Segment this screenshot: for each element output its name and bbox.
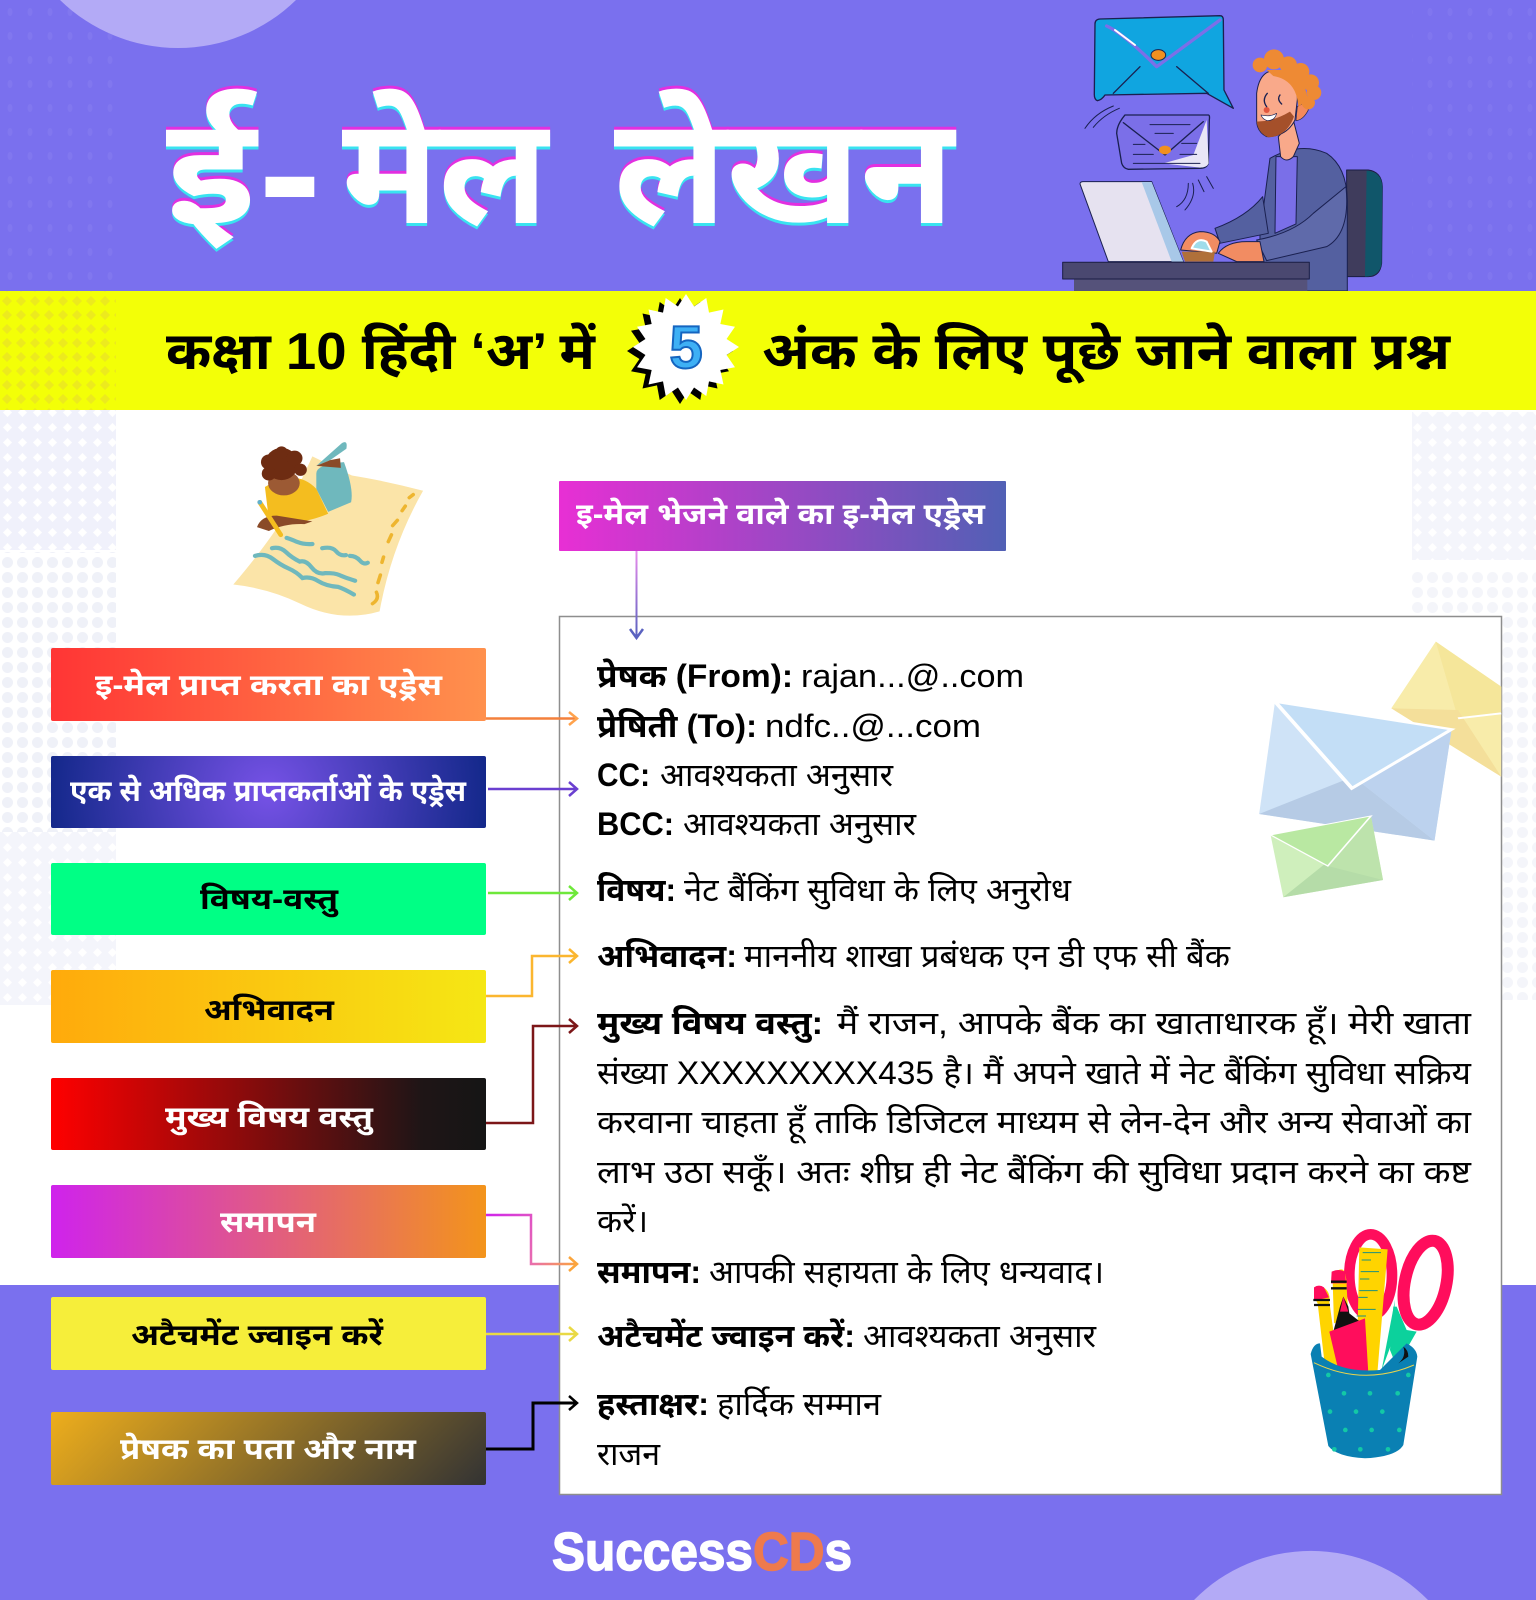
label: subject: विषय-वस्तु xyxy=(200,882,340,918)
motion lines xyxy=(1085,106,1213,210)
badge: 5 marks star xyxy=(627,294,739,404)
arrow: multiple to cc xyxy=(488,782,577,796)
title: लेखन xyxy=(614,84,957,252)
label: main content xyxy=(51,1078,486,1150)
label: closing: समापन xyxy=(220,1206,317,1239)
header label: sender email address: इ-मेल भेजने वाले का इ-मेल एड्रेस xyxy=(576,496,986,532)
label: sender name and address: प्रेषक का पता और नाम xyxy=(120,1431,416,1466)
title: मेल xyxy=(342,90,550,258)
text: from: प्रेषक (From): xyxy=(597,658,793,694)
icon: laptop xyxy=(1080,182,1183,262)
label: salutation xyxy=(51,970,486,1043)
label: recipient address xyxy=(51,648,486,721)
label: salutation: अभिवादन xyxy=(204,993,335,1027)
text: from: rajan...@..com xyxy=(801,658,1024,694)
illustration: man typing with envelopes xyxy=(1063,16,1382,292)
arrow: sender to from xyxy=(630,551,643,638)
icon: envelopes xyxy=(1259,642,1501,897)
title: मेल xyxy=(342,84,550,252)
arrow: salutation xyxy=(486,949,577,996)
title xyxy=(166,78,957,268)
text: bcc: BCC: xyxy=(597,806,674,842)
arrow: subject xyxy=(488,886,577,900)
man xyxy=(1181,49,1347,291)
label: attachment xyxy=(51,1297,486,1370)
badge: 5 marks star: 5 xyxy=(669,314,703,381)
arrow: recipient to to xyxy=(486,712,577,725)
text: to: प्रेषिती (To): xyxy=(597,708,757,744)
label: attachment: अटैचमेंट ज्वाइन करें xyxy=(131,1317,384,1352)
arrow: attachment xyxy=(486,1327,577,1341)
text: closing: समापन: xyxy=(597,1254,701,1290)
icon: small envelope xyxy=(1117,115,1210,169)
text: signature: हस्ताक्षर: xyxy=(597,1386,709,1422)
arrow: main content xyxy=(486,1019,577,1123)
text: attachment: अटैचमेंट ज्वाइन करें: xyxy=(597,1318,855,1354)
banner: yellow subtitle strip xyxy=(0,291,1536,410)
label: sender name and address xyxy=(51,1412,486,1485)
logo: SuccessCDs: SuccessCDs xyxy=(552,1522,852,1582)
text: body xyxy=(597,1004,1472,1239)
text: signature: हार्दिक सम्मान xyxy=(717,1386,882,1422)
label: subject xyxy=(51,863,486,935)
title: लेखन xyxy=(614,87,957,255)
text: body: मैं राजन, आपके बैंक का खाताधारक हूँ। मेरी खाता xyxy=(837,1004,1472,1045)
text: salutation: माननीय शाखा प्रबंधक एन डी एफ सी बैंक xyxy=(744,938,1231,974)
text: body: संख्या XXXXXXXXX435 है। मैं अपने खाते में नेट बैंकिंग सुविधा सक्रिय xyxy=(597,1055,1472,1093)
text: bcc xyxy=(597,806,917,844)
text: to xyxy=(597,708,981,744)
text: subject: नेट बैंकिंग सुविधा के लिए अनुरोध xyxy=(684,872,1072,910)
header label: sender email address xyxy=(559,481,1006,551)
text: attachment: आवश्यकता अनुसार xyxy=(863,1318,1097,1356)
text: bcc: आवश्यकता अनुसार xyxy=(683,806,917,844)
label: main content: मुख्य विषय वस्तु xyxy=(165,1100,375,1136)
label: multiple recipients: एक से अधिक प्राप्तकर्ताओं के एड्रेस xyxy=(70,773,467,809)
subtitle text right: अंक के लिए पूछे जाने वाला प्रश्न xyxy=(762,322,1451,384)
icon: chair xyxy=(1347,170,1382,277)
text: body: लाभ उठा सकूँ। अतः शीघ्र ही नेट बैंकिंग की सुविधा प्रदान करने का कष्ट xyxy=(597,1153,1472,1192)
icon: pencil cup xyxy=(1311,1234,1455,1458)
text: signature xyxy=(597,1386,882,1472)
text: cc: CC: xyxy=(597,757,650,793)
text: closing: आपकी सहायता के लिए धन्यवाद। xyxy=(709,1254,1104,1290)
arrow: signature xyxy=(486,1396,577,1449)
text: attachment xyxy=(597,1318,1097,1356)
title: ई xyxy=(166,90,259,258)
text: from xyxy=(597,658,1024,694)
label: recipient address: इ-मेल प्राप्त करता का एड्रेस xyxy=(95,667,443,703)
text: to: ndfc..@...com xyxy=(765,708,981,744)
text: cc: आवश्यकता अनुसार xyxy=(660,757,894,795)
title: लेखन xyxy=(614,90,957,258)
icon: desk xyxy=(1063,262,1309,292)
title: ई xyxy=(166,87,259,255)
label: closing xyxy=(51,1185,486,1258)
text: signature: राजन xyxy=(597,1436,661,1472)
text: salutation: अभिवादन: xyxy=(597,938,737,974)
title: ई xyxy=(166,84,259,252)
illustration: child writing on paper xyxy=(233,442,423,616)
title: - xyxy=(258,78,322,268)
icon: large envelope xyxy=(1094,16,1233,108)
text: body: मुख्य विषय वस्तु: xyxy=(597,1005,823,1043)
text: body: करवाना चाहता हूँ ताकि डिजिटल माध्यम से लेन-देन और अन्य सेवाओं का xyxy=(597,1103,1472,1144)
text: subject: विषय: xyxy=(597,872,676,908)
arrow: closing xyxy=(486,1215,577,1271)
label: multiple recipients xyxy=(51,756,486,828)
subtitle text left: कक्षा 10 हिंदी ‘अ’ में xyxy=(166,322,596,381)
title: मेल xyxy=(342,87,550,255)
panel: email sample xyxy=(560,616,1502,1494)
text: body: करें। xyxy=(597,1203,648,1239)
